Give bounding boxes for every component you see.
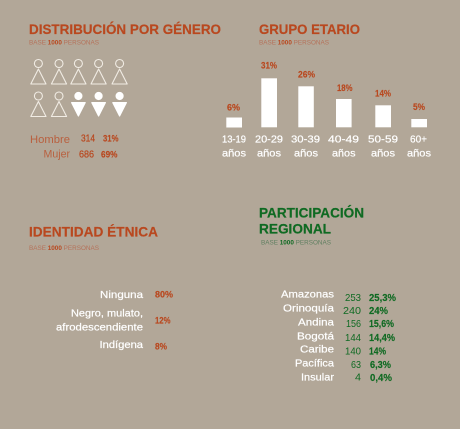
bar chart: age groups bbox=[222, 61, 431, 160]
row: negro, mulato, afrodescendiente: Negro, mulato, bbox=[71, 308, 143, 320]
row: bogotá bbox=[297, 331, 395, 344]
panel: identidad étnica bbox=[29, 224, 174, 352]
heading: distribución por género: DISTRIBUCIÓN POR GÉNERO bbox=[29, 20, 221, 37]
row: hombre bbox=[30, 133, 119, 146]
row: pacífica: 6,3% bbox=[370, 360, 391, 371]
row: orinoquía bbox=[283, 303, 388, 317]
row: insular bbox=[301, 372, 392, 384]
row: ninguna bbox=[100, 289, 174, 301]
row: negro, mulato, afrodescendiente bbox=[56, 308, 171, 334]
bar: 50-59: años bbox=[371, 148, 395, 160]
bar: 50-59 bbox=[368, 89, 398, 160]
heading: participación regional: PARTICIPACIÓN bbox=[259, 204, 364, 221]
row: indígena: 8% bbox=[155, 341, 167, 352]
bar: 30-39: 26% bbox=[298, 70, 315, 81]
row: andina: 156 bbox=[346, 318, 361, 330]
row: amazonas: 25,3% bbox=[369, 293, 396, 304]
heading: participación regional bbox=[259, 204, 364, 237]
row: hombre: 314 bbox=[81, 133, 95, 145]
bar: 30-39: 30-39 bbox=[291, 134, 320, 146]
row: andina: Andina bbox=[298, 316, 334, 328]
heading: grupo etario: GRUPO ETARIO bbox=[259, 21, 360, 37]
panel: grupo etario bbox=[222, 21, 431, 160]
row: indígena bbox=[100, 339, 167, 352]
row: bogotá: 14,4% bbox=[369, 333, 395, 344]
row: mujer: Mujer bbox=[44, 149, 70, 161]
row: caribe: Caribe bbox=[300, 344, 334, 356]
row: andina bbox=[298, 316, 394, 330]
row: mujer bbox=[44, 148, 118, 161]
bar: 60+: 60+ bbox=[410, 134, 427, 146]
row: bogotá: Bogotá bbox=[297, 331, 334, 343]
bar: 13-19: años bbox=[222, 148, 246, 160]
bar: 13-19: 13-19 bbox=[222, 134, 246, 146]
bar: 13-19 bbox=[222, 102, 246, 160]
bar: 13-19: 6% bbox=[227, 102, 241, 113]
row: pacífica: 63 bbox=[351, 359, 361, 371]
row: insular: 4 bbox=[355, 372, 361, 384]
row: hombre: 31% bbox=[103, 134, 119, 145]
bar: 40-49 bbox=[328, 83, 359, 160]
row: mujer: 69% bbox=[101, 149, 118, 160]
panel: participación regional bbox=[259, 204, 396, 384]
row: hombre: Hombre bbox=[30, 134, 70, 146]
row: pacífica: Pacífica bbox=[295, 358, 334, 370]
row: caribe: 140 bbox=[345, 346, 361, 358]
bar: 60+: 5% bbox=[413, 102, 425, 113]
heading: participación regional: REGIONAL bbox=[259, 221, 331, 237]
base note: BASE 1000 PERSONAS bbox=[29, 41, 99, 47]
row: negro, mulato, afrodescendiente: afrodescendiente bbox=[56, 322, 143, 334]
row: ninguna: Ninguna bbox=[100, 289, 143, 301]
row: amazonas: Amazonas bbox=[281, 289, 334, 301]
row: orinoquía: 240 bbox=[343, 305, 361, 317]
heading: identidad étnica: IDENTIDAD ÉTNICA bbox=[29, 224, 158, 240]
row: ninguna: 80% bbox=[155, 290, 174, 301]
bar: 20-29: años bbox=[257, 148, 281, 160]
row: negro, mulato, afrodescendiente: 12% bbox=[155, 316, 171, 327]
bar: 40-49: años bbox=[332, 148, 356, 160]
bar: 20-29: 31% bbox=[261, 61, 277, 72]
row: orinoquía: Orinoquía bbox=[283, 303, 334, 315]
row: mujer: 686 bbox=[79, 148, 94, 160]
row: orinoquía: 24% bbox=[369, 306, 388, 317]
bar: 30-39: años bbox=[294, 148, 318, 160]
base note: BASE 1000 PERSONAS bbox=[29, 246, 99, 252]
bar: 60+: años bbox=[407, 148, 431, 160]
row: caribe: 14% bbox=[369, 347, 386, 358]
row: insular: Insular bbox=[301, 372, 335, 384]
base note: BASE 1000 PERSONAS bbox=[261, 240, 331, 246]
bar: 20-29 bbox=[255, 61, 283, 160]
bar: 50-59: 50-59 bbox=[368, 134, 398, 146]
bar: 50-59: 14% bbox=[375, 89, 391, 100]
base note: BASE 1000 PERSONAS bbox=[259, 41, 329, 47]
row: pacífica bbox=[295, 358, 391, 371]
bar: 40-49: 18% bbox=[337, 83, 353, 94]
row: bogotá: 144 bbox=[345, 332, 361, 344]
icons: women filled figures bbox=[72, 92, 126, 116]
panel: distribución por género bbox=[29, 20, 221, 161]
icons: men outline figures bbox=[31, 60, 127, 116]
bar: 30-39 bbox=[291, 70, 320, 160]
row: caribe bbox=[300, 344, 386, 358]
row: amazonas bbox=[281, 289, 396, 304]
bar: 60+ bbox=[407, 102, 431, 160]
bar: 20-29: 20-29 bbox=[255, 134, 283, 146]
row: amazonas: 253 bbox=[345, 292, 361, 304]
row: insular: 0,4% bbox=[370, 373, 392, 384]
bar: 40-49: 40-49 bbox=[328, 134, 359, 146]
row: andina: 15,6% bbox=[369, 319, 394, 330]
row: indígena: Indígena bbox=[100, 339, 143, 351]
